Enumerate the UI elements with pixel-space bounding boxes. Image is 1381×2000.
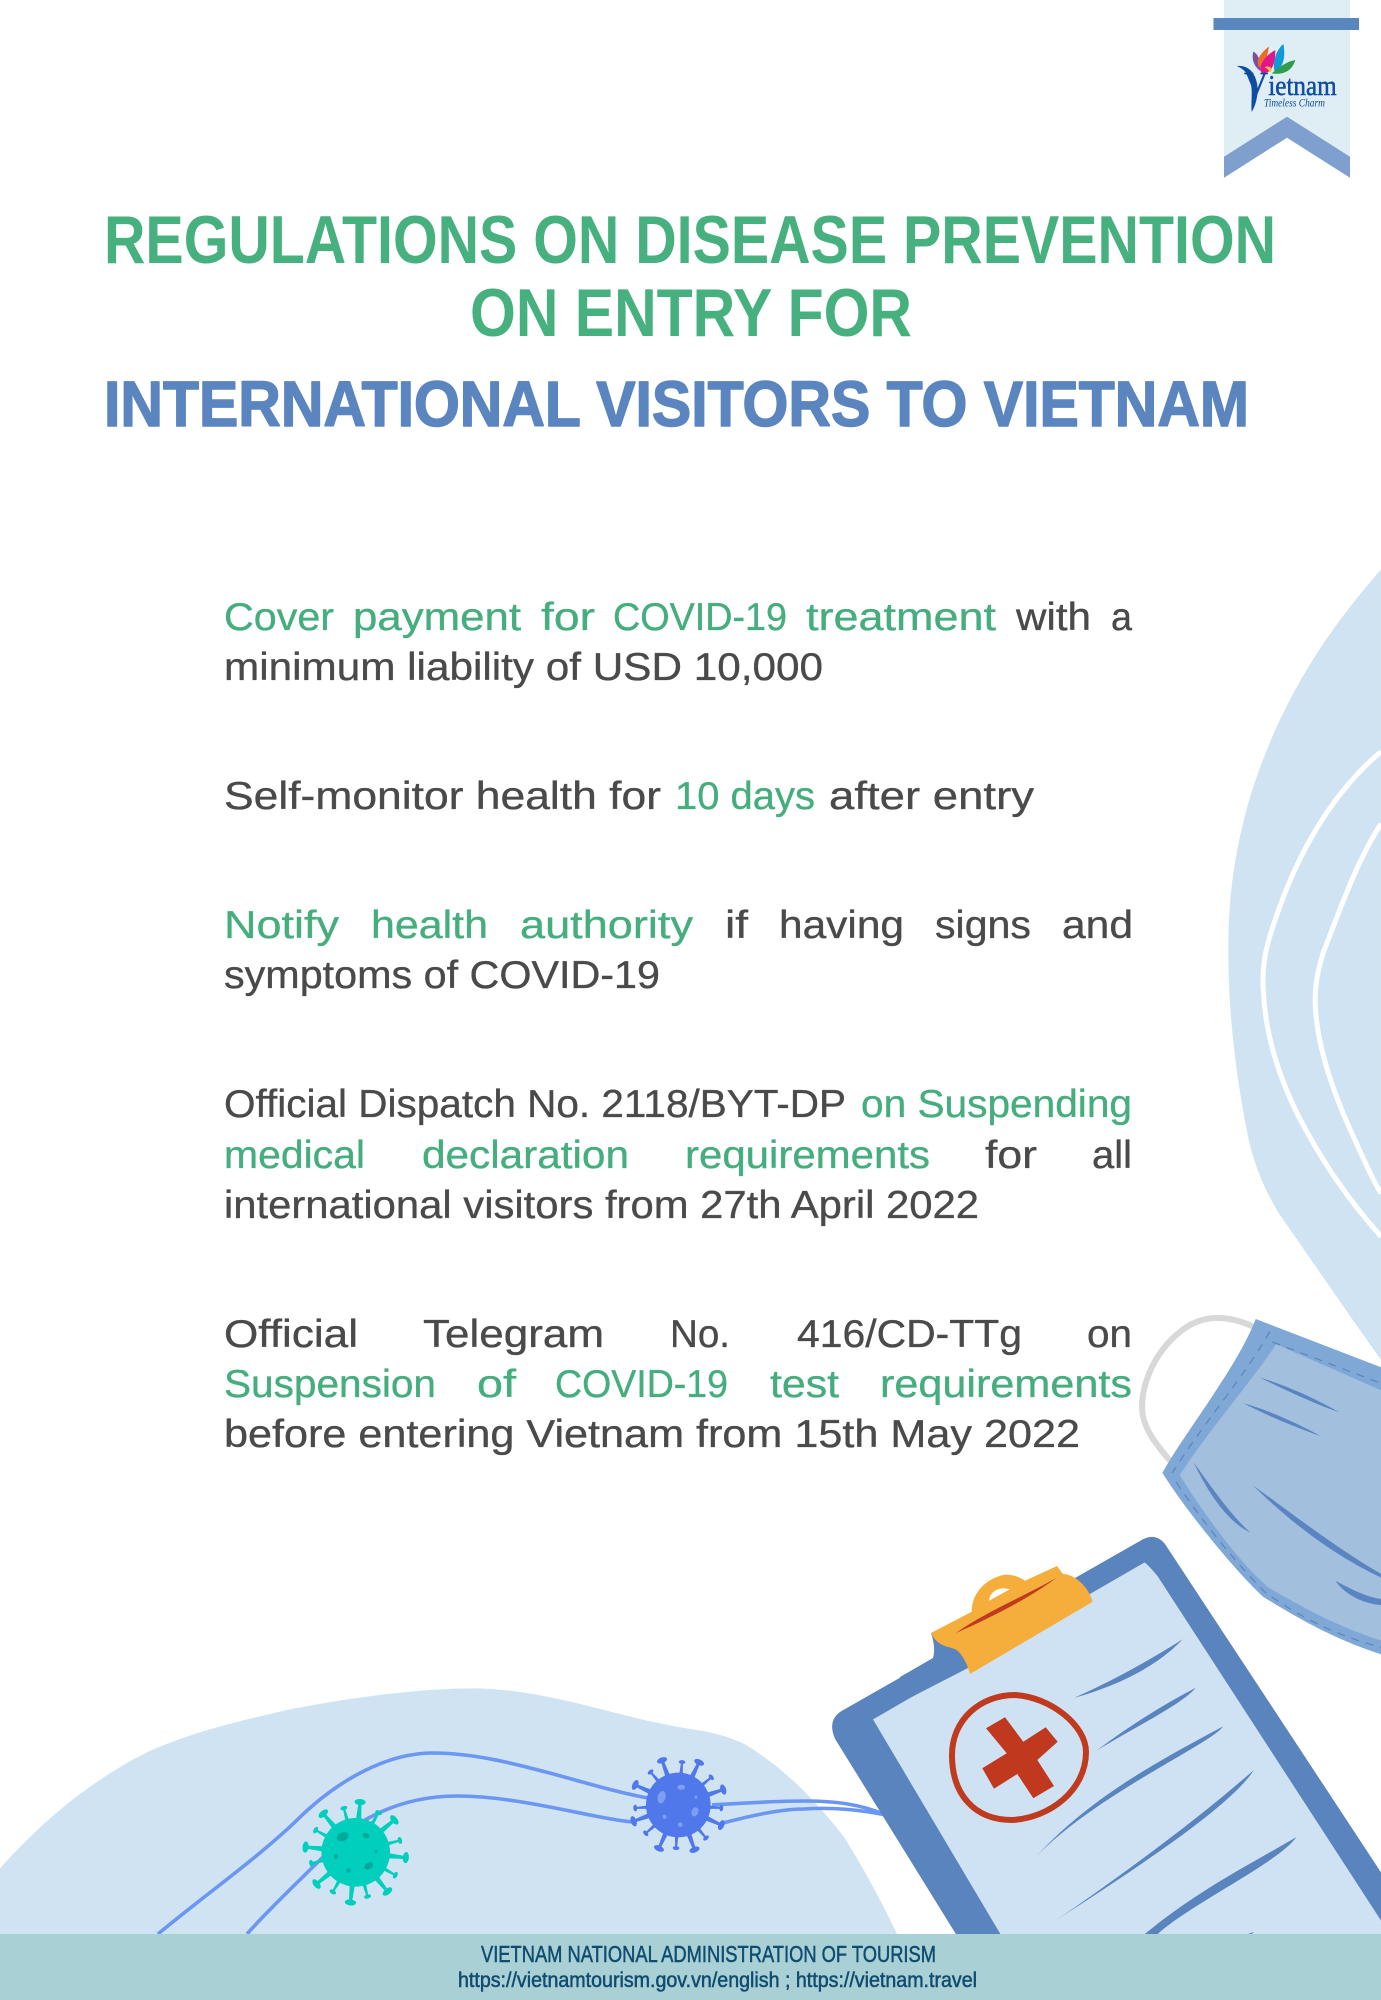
ribbon top bar [1214,18,1359,30]
logo tagline: Timeless Charm [1264,98,1325,110]
text block: official telegram [224,1313,1132,1456]
text block: insurance: for [541,596,595,639]
text block: self-monitor: 10 days [675,775,815,818]
text block: official telegram: 416/CD-TTg [797,1313,1022,1356]
text block: official telegram: of [477,1363,516,1406]
text block: self-monitor: Self-monitor health for [224,775,661,818]
text block: official dispatch: all [1092,1134,1132,1177]
virus threads [158,1753,886,1934]
text block: official telegram: No. [670,1313,730,1356]
text block: official telegram: Official [224,1313,358,1356]
text block: official dispatch: for [985,1134,1037,1177]
text block: notify: Notify [224,904,340,947]
text block: insurance: with [1015,596,1091,639]
title [104,202,1276,440]
footer organisation: VIETNAM NATIONAL ADMINISTRATION OF TOURISM [481,1941,936,1967]
text block: official telegram: before entering Vietnam from 15th May 2022 [224,1413,1080,1456]
text block: official dispatch: medical [224,1134,365,1177]
background blob: right side [1228,569,1381,1360]
text block: official dispatch: on Suspending [861,1083,1132,1126]
text block: official dispatch [224,1083,1132,1227]
logo ribbon [1214,0,1359,178]
text block: official telegram: requirements [880,1363,1132,1406]
footer band [0,1934,1381,2000]
clipboard clip [900,1566,1093,1703]
icon: blue virus [629,1756,728,1854]
text block: notify [224,904,1133,997]
ribbon chevron [1224,117,1350,178]
text block: insurance: payment [353,596,521,639]
lotus petals [1253,44,1295,74]
logo wordmark: V [1244,66,1268,103]
V swoosh [1237,66,1258,112]
text block: official telegram: Suspension [224,1363,436,1406]
icon: surgical mask [1142,1318,1381,1654]
text block: insurance: Cover [224,596,334,639]
red cross badge [952,1695,1086,1820]
text block: official dispatch: Official Dispatch No. 2118/BYT-DP [224,1083,846,1126]
text block: insurance [224,596,1133,689]
text block: notify: if [725,904,748,947]
background hill: bottom left [0,1688,898,1937]
text block: official telegram: Telegram [423,1313,604,1356]
text block: official telegram: on [1087,1313,1132,1356]
footer links: https://vietnamtourism.gov.vn/english ; https://vietnam.travel [458,1969,977,1992]
mask stitching [1172,1331,1381,1647]
text block: notify: and [1062,904,1133,947]
mask body [1162,1319,1381,1654]
text block: notify: having [779,904,904,947]
mask folds [1194,1377,1381,1605]
text block: insurance: a [1111,596,1133,639]
text block: notify: symptoms of COVID-19 [224,954,660,997]
text block: official telegram: COVID-19 [555,1363,728,1406]
logo: Vietnam Timeless Charm [1237,44,1337,112]
title line 3: INTERNATIONAL VISITORS TO VIETNAM [104,368,1249,440]
text block: official dispatch: declaration [422,1134,629,1177]
text block: insurance: minimum liability of USD 10,000 [224,646,823,689]
icon: green virus [302,1799,409,1906]
text block: official telegram: test [770,1363,839,1406]
clipboard board and paper [832,1537,1381,1937]
mask ear loop [1142,1318,1254,1461]
icon: medical clipboard [832,1537,1381,1937]
text block: insurance: treatment [806,596,996,639]
text block: self-monitor: after entry [829,775,1035,818]
text block: notify: health [371,904,488,947]
text block: notify: authority [520,904,694,947]
text block: official dispatch: international visitors from 27th April 2022 [224,1184,979,1227]
text block: official dispatch: requirements [685,1134,930,1177]
text block: notify: signs [935,904,1031,947]
title line 2: ON ENTRY FOR [470,275,912,351]
logo wordmark: ietnam [1268,71,1337,102]
text block: self-monitor [224,775,1035,818]
ribbon panel [1224,0,1350,157]
text block: insurance: COVID-19 [613,596,787,639]
